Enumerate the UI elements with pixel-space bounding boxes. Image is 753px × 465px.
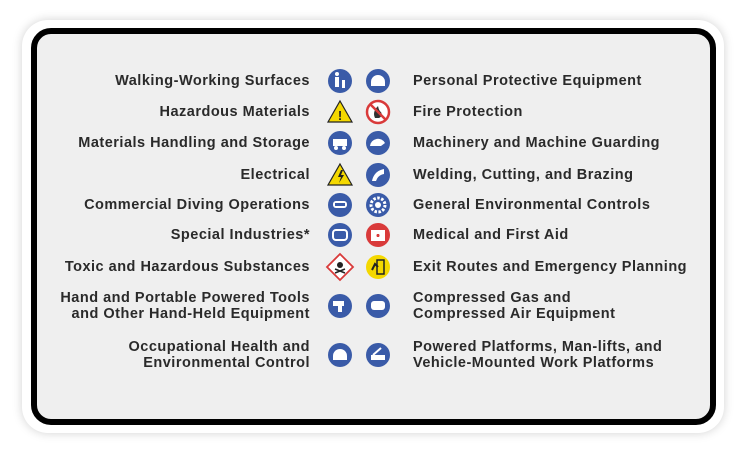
text: Machinery and Machine Guarding: [413, 135, 660, 151]
text: Walking-Working Surfaces: [115, 73, 310, 89]
text: Fire Protection: [413, 104, 523, 120]
text: Compressed Air Equipment: [413, 306, 615, 322]
icon: walking: [328, 69, 352, 93]
icon: exit: [366, 255, 390, 279]
text: Medical and First Aid: [413, 227, 569, 243]
right labels: [413, 73, 687, 371]
text: Electrical: [240, 167, 310, 183]
text: and Other Hand-Held Equipment: [72, 306, 310, 322]
icon: gear: [366, 193, 390, 217]
text: Special Industries*: [171, 227, 310, 243]
text: Hand and Portable Powered Tools: [60, 290, 310, 306]
text: Personal Protective Equipment: [413, 73, 642, 89]
text: General Environmental Controls: [413, 197, 650, 213]
icon: fire prohibition: [367, 101, 389, 123]
icon: truck: [328, 131, 352, 155]
text: Occupational Health and: [128, 339, 310, 355]
text: Vehicle-Mounted Work Platforms: [413, 355, 654, 371]
text: Welding, Cutting, and Brazing: [413, 167, 633, 183]
text: Environmental Control: [143, 355, 310, 371]
left labels: [60, 73, 310, 371]
text: Powered Platforms, Man-lifts, and: [413, 339, 662, 355]
text: Commercial Diving Operations: [84, 197, 310, 213]
icon: first aid: [366, 223, 390, 247]
icon: toxic diamond: [327, 254, 353, 280]
icon: helmet: [366, 69, 390, 93]
icon: welding: [366, 163, 390, 187]
icon: electrical: [328, 164, 352, 185]
icon: machinery: [366, 131, 390, 155]
sign panel: [31, 28, 716, 425]
icon: special industries: [328, 223, 352, 247]
text: Materials Handling and Storage: [78, 135, 310, 151]
icon: drill: [328, 294, 352, 318]
text: Compressed Gas and: [413, 290, 571, 306]
icon: hazard triangle: !: [338, 108, 342, 123]
text: Exit Routes and Emergency Planning: [413, 259, 687, 275]
icon: hazard triangle: [328, 101, 352, 123]
icon: platform vehicle: [366, 343, 390, 367]
text: Hazardous Materials: [159, 104, 310, 120]
icon: health helmet: [328, 343, 352, 367]
icon: diving: [328, 193, 352, 217]
icon: compressor: [366, 294, 390, 318]
text: Toxic and Hazardous Substances: [65, 259, 310, 275]
